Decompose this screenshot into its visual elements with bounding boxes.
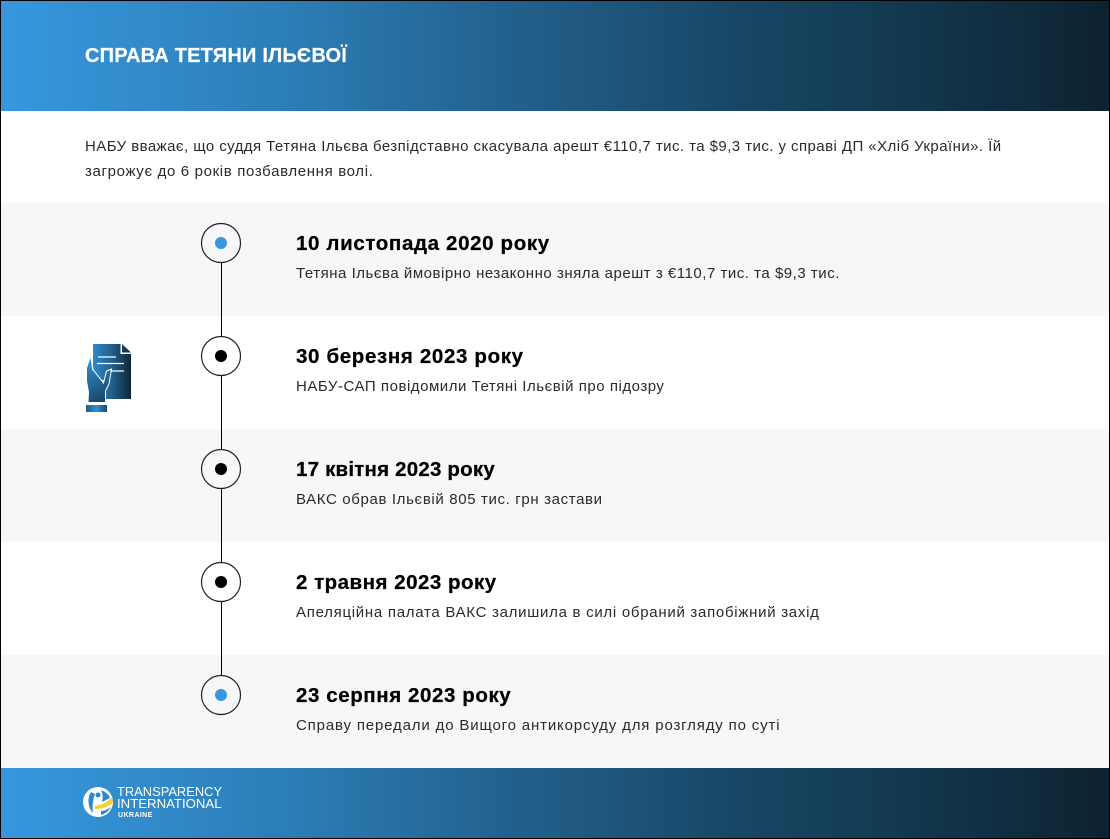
marker 4 (202, 562, 240, 602)
intro text: НАБУ вважає, що суддя Тетяна Ільєва безпідставно скасувала арешт €110,7 тис. та $9,3 тис. у справі ДП «Хліб України». Їй (85, 138, 1002, 155)
event 4 text: Апеляційна палата ВАКС залишила в силі обраний запобіжний захід (296, 604, 820, 621)
logo text: INTERNATIONAL (117, 796, 222, 811)
timeline line (220, 243, 222, 695)
event 3 date: 17 квітня 2023 року (296, 458, 495, 481)
event 4 date: 2 травня 2023 року (296, 571, 497, 594)
intro text: загрожує до 6 років позбавлення волі. (85, 163, 374, 180)
event 2 text: НАБУ-САП повідомили Тетяні Ільєвій про підозру (296, 378, 664, 395)
event 4 (296, 571, 820, 621)
event 5 text: Справу передали до Вищого антикорсуду для розгляду по суті (296, 717, 780, 734)
icon: hand holding document (86, 344, 131, 412)
event 3 text: ВАКС обрав Ільєвій 805 тис. грн застави (296, 491, 603, 508)
logo text: TRANSPARENCY (117, 784, 222, 799)
marker 3 (202, 450, 240, 488)
marker 2 (202, 336, 240, 376)
marker 1 (202, 224, 240, 262)
event 2 (296, 345, 664, 395)
header banner (1, 1, 1109, 111)
marker 5 (202, 676, 240, 714)
logo emblem (83, 787, 113, 817)
event 5 date: 23 серпня 2023 року (296, 684, 511, 707)
row background 1 (1, 203, 1109, 316)
event 5 (296, 684, 780, 734)
event 1 text: Тетяна Ільєва ймовірно незаконно зняла арешт з €110,7 тис. та $9,3 тис. (296, 265, 840, 282)
event 1 date: 10 листопада 2020 року (296, 232, 550, 255)
timeline (200, 222, 242, 716)
footer banner (1, 768, 1109, 838)
row background 3 (1, 429, 1109, 542)
row background 5 (1, 655, 1109, 768)
intro text (85, 138, 1002, 180)
logo: Transparency International Ukraine (83, 784, 222, 819)
logo text: UKRAINE (118, 812, 153, 819)
event 3 (296, 458, 603, 508)
logo text (117, 784, 222, 819)
event 1 (296, 232, 840, 282)
event 2 date: 30 березня 2023 року (296, 345, 524, 368)
title: СПРАВА ТЕТЯНИ ІЛЬЄВОЇ (85, 45, 347, 67)
